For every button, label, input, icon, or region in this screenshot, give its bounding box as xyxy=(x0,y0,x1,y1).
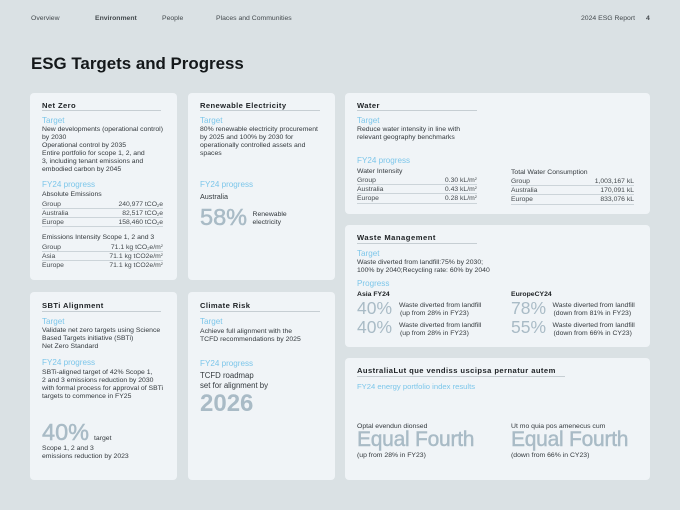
table: water intensity: 0.43 kL/m2 xyxy=(445,185,477,193)
text: SBTi target: Net Zero Standard xyxy=(42,343,98,350)
table: emissions intensity: 71.1 kg tCO2e/m2 xyxy=(111,242,163,250)
text: renewable target xyxy=(200,126,318,157)
text: renewable target: operationally controlled assets and xyxy=(200,142,305,149)
text: water target: relevant geography benchmarks xyxy=(357,134,455,141)
text: renewable electricity label: Renewable xyxy=(252,211,287,218)
label: target: Target xyxy=(42,317,64,326)
panel: water xyxy=(345,93,650,214)
heading: waste management xyxy=(357,233,477,244)
text: SBTi progress: with formal process for approval of SBTi xyxy=(42,385,163,392)
text: Europe landfill: (down from 81% in FY23) xyxy=(554,310,631,317)
group: result left: (up from 28% in FY23) xyxy=(357,452,426,458)
label: FY24 progress: FY24 progress xyxy=(42,180,95,189)
label: target: Target xyxy=(42,116,64,124)
label: progress: Progress xyxy=(357,279,389,288)
table: water intensity xyxy=(357,168,477,204)
navigation bar: Overview xyxy=(31,14,60,22)
navigation bar: 4 xyxy=(646,14,650,22)
text: net zero target: by 2030 xyxy=(42,134,66,141)
label: target: Target xyxy=(357,249,380,258)
text: net zero target: 3, including tenant emissions and xyxy=(42,158,143,165)
table: absolute emissions: 158,460 tCO2e xyxy=(118,219,163,226)
stat: 40%: 40% xyxy=(42,419,89,445)
heading: net zero xyxy=(42,100,161,111)
table: emissions intensity xyxy=(42,242,163,269)
text: Europe landfill second: Waste diverted from landfill xyxy=(552,322,635,328)
text: australia: Australia xyxy=(200,192,228,200)
text: Europe landfill second xyxy=(552,322,635,336)
table: absolute emissions: Australia xyxy=(42,210,68,217)
stat: 58%: 58% xyxy=(200,204,247,230)
label: FY24 progress: FY24 progress xyxy=(42,358,95,367)
stat: equal fourth right: Equal Fourth xyxy=(511,428,628,451)
heading: SBTi alignment xyxy=(42,301,161,312)
text: renewable target: spaces xyxy=(200,150,222,157)
heading: net zero: Net Zero xyxy=(42,100,76,110)
table: absolute emissions xyxy=(42,200,163,227)
heading: renewable electricity xyxy=(200,100,320,111)
heading: climate risk xyxy=(200,301,320,312)
label: FY24 progress: FY24 progress xyxy=(200,358,253,368)
label: target: Target xyxy=(357,116,380,124)
text: SBTi progress: SBTi-aligned target of 42% Scope 1, xyxy=(42,368,152,376)
text: SBTi progress xyxy=(42,368,163,400)
text: emissions intensity: Emissions Intensity Scope 1, 2 and 3 xyxy=(42,234,154,241)
label: FY24 progress: FY24 progress xyxy=(357,156,410,165)
panel: waste management xyxy=(345,225,650,347)
stat: 2026: 2026 xyxy=(200,390,253,416)
navigation bar: Environment xyxy=(95,15,137,22)
group: Europe CY24 xyxy=(511,290,635,336)
label: target: Target xyxy=(200,317,222,326)
text: absolute emissions: Absolute Emissions xyxy=(42,191,102,198)
group: Europe CY24: EuropeCY24 xyxy=(511,290,552,298)
text: water target: Reduce water intensity in line with xyxy=(357,126,460,133)
text: SBTi progress: targets to commence in FY25 xyxy=(42,393,131,400)
panel: SBTi alignment xyxy=(30,292,177,480)
stat: equal fourth left: Equal Fourth xyxy=(357,428,474,451)
label: FY24 progress: FY24 progress xyxy=(200,180,253,189)
label: target: Target xyxy=(200,116,222,124)
text: climate target xyxy=(200,328,301,343)
text: renewable target: 80% renewable electricity procurement xyxy=(200,126,318,132)
text: SBTi progress: 2 and 3 emissions reduction by 2030 xyxy=(42,377,153,384)
text: SBTi target xyxy=(42,327,160,350)
table: absolute emissions: Group xyxy=(42,200,61,208)
text: Asia landfill second xyxy=(399,322,481,336)
text: TCFD roadmap xyxy=(200,371,268,390)
text: renewable electricity label xyxy=(252,211,287,226)
table: water intensity: Europe xyxy=(357,195,379,202)
table: absolute emissions: 82,517 tCO2e xyxy=(122,210,163,217)
text: scope note xyxy=(42,444,129,460)
heading: renewable electricity: Renewable Electricity xyxy=(200,100,286,110)
group: result right xyxy=(511,422,628,458)
text: SBTi target: Validate net zero targets using Science xyxy=(42,327,160,334)
group: Asia FY24 xyxy=(357,290,481,336)
table: absolute emissions: 240,977 tCO2e xyxy=(118,200,163,208)
text: climate target: TCFD recommendations by 2025 xyxy=(200,336,301,343)
stat: Europe 78%: 78% xyxy=(511,298,546,318)
heading: water: Water xyxy=(357,100,380,110)
text: TCFD roadmap: TCFD roadmap xyxy=(200,371,254,380)
text: Europe landfill xyxy=(552,302,635,317)
table: total water consumption xyxy=(511,168,634,205)
heading: waste management: Waste Management xyxy=(357,233,436,242)
text: Asia landfill: (up from 28% in FY23) xyxy=(400,310,469,317)
text: SBTi target: Based Targets initiative (SBTi) xyxy=(42,335,133,342)
navigation bar xyxy=(31,14,650,22)
text: scope note: Scope 1, 2 and 3 xyxy=(42,444,94,452)
stat: Europe 55%: 55% xyxy=(511,316,546,336)
table: water intensity: 0.30 kL/m2 xyxy=(445,176,477,184)
text: target label: target xyxy=(94,434,112,442)
text: Europe landfill second: (down from 66% in CY23) xyxy=(554,330,632,336)
table: total water consumption: Europe xyxy=(511,196,533,203)
text: renewable target: by 2025 and 100% by 2030 for xyxy=(200,134,293,141)
table: water intensity: 0.28 kL/m2 xyxy=(445,194,477,202)
table: emissions intensity: Group xyxy=(42,244,61,250)
heading: energy index: AustraliaLut que vendiss uscipsa pernatur autem xyxy=(357,366,556,375)
text: TCFD roadmap: set for alignment by xyxy=(200,380,268,390)
table: emissions intensity: Asia xyxy=(42,253,55,260)
navigation bar: People xyxy=(162,14,183,22)
panel: renewable electricity xyxy=(188,93,334,280)
text: net zero target xyxy=(42,126,163,173)
table: emissions intensity: 71.1 kg tCO2e/m2 xyxy=(109,261,163,269)
text: waste target: 100% by 2040;Recycling rate: 60% by 2040 xyxy=(357,267,490,274)
text: climate target: Achieve full alignment with the xyxy=(200,328,292,335)
text: water target xyxy=(357,126,460,141)
table: water intensity: Water Intensity xyxy=(357,168,402,174)
table: emissions intensity: Europe xyxy=(42,262,64,269)
text: Asia landfill second: Waste diverted from landfill xyxy=(399,322,481,328)
text: net zero target: Entire portfolio for scope 1, 2, and xyxy=(42,150,145,157)
group: result left xyxy=(357,422,474,458)
navigation bar: 2024 ESG Report xyxy=(581,14,635,22)
panel: climate risk xyxy=(188,292,334,480)
table: total water consumption: 170,091 kL xyxy=(600,187,634,194)
table: total water consumption: 1,003,167 kL xyxy=(595,178,634,185)
group: result left: Optal evendun dionsed xyxy=(357,422,427,430)
group: result right: (down from 66% in CY23) xyxy=(511,452,589,458)
text: Asia landfill: Waste diverted from landfill xyxy=(399,302,481,308)
text: renewable electricity label: electricity xyxy=(252,219,281,226)
group: result right: Ut mo quia pos amenecus cum xyxy=(511,422,605,430)
heading: water xyxy=(357,100,477,111)
panel: net zero xyxy=(30,93,177,280)
label: FY24 energy portfolio: FY24 energy portfolio index results xyxy=(357,382,475,391)
title: ESG Targets and Progress xyxy=(31,54,244,73)
text: Europe landfill: Waste diverted from landfill xyxy=(552,302,635,308)
heading: climate risk: Climate Risk xyxy=(200,301,250,310)
table: water intensity: Australia xyxy=(357,186,383,193)
text: Asia landfill second: (up from 28% in FY23) xyxy=(400,330,469,336)
text: net zero target: embodied carbon by 2045 xyxy=(42,166,121,173)
text: scope note: emissions reduction by 2023 xyxy=(42,453,129,460)
text: waste target xyxy=(357,259,490,274)
text: net zero target: Operational control by 2035 xyxy=(42,142,126,149)
text: waste target: Waste diverted from landfill:75% by 2030; xyxy=(357,259,483,266)
text: Asia landfill xyxy=(399,302,481,317)
panel: energy index xyxy=(345,358,650,480)
table: emissions intensity: 71.1 kg tCO2e/m2 xyxy=(109,252,163,260)
table: total water consumption: Total Water Consumption xyxy=(511,168,588,176)
stat: Asia 40% second: 40% xyxy=(357,316,392,336)
stat: Asia 40%: 40% xyxy=(357,298,392,318)
table: total water consumption: Australia xyxy=(511,187,537,194)
table: water intensity: Group xyxy=(357,177,376,184)
table: total water consumption: 833,076 kL xyxy=(600,196,634,203)
table: absolute emissions: Europe xyxy=(42,219,64,226)
group: Asia FY24: Asia FY24 xyxy=(357,290,390,298)
heading: SBTi alignment: SBTi Alignment xyxy=(42,301,104,310)
text: net zero target: New developments (operational control) xyxy=(42,126,163,132)
navigation bar: Places and Communities xyxy=(216,14,292,22)
table: total water consumption: Group xyxy=(511,178,530,185)
